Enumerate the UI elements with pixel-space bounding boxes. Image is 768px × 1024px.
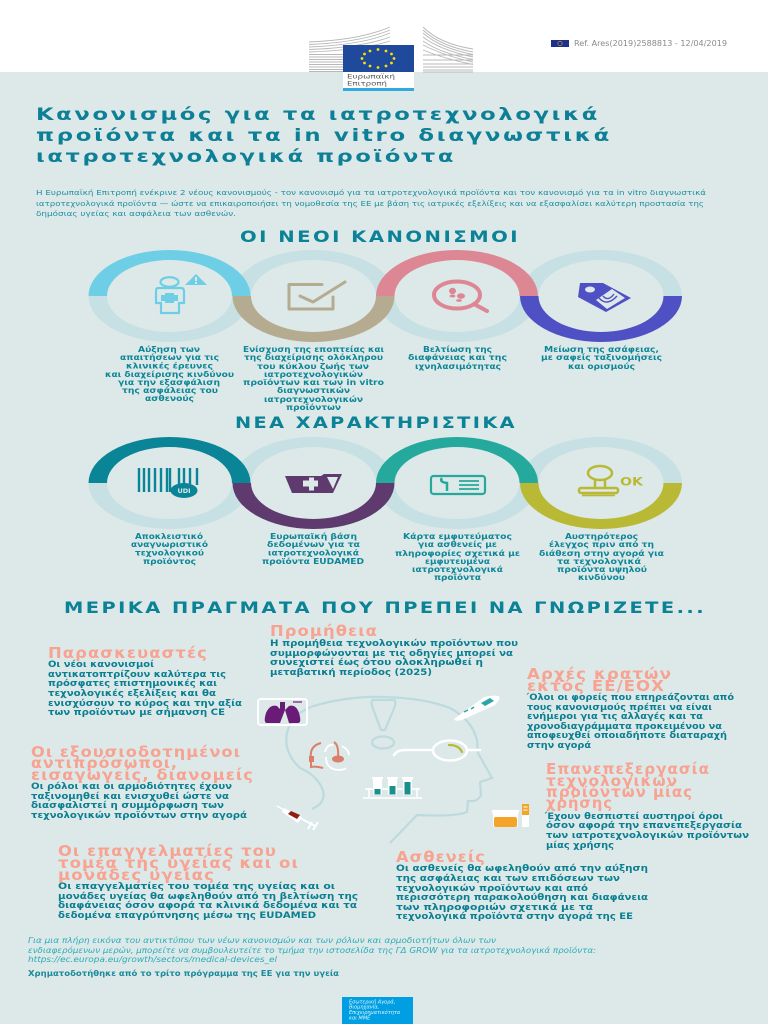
- block: non-EU/EEA authorities: [525, 665, 734, 751]
- title: ιατροτεχνολογικά προϊόντα: [36, 147, 456, 167]
- caption 2: προϊόντων: [286, 402, 341, 412]
- block: manufacturers: [48, 644, 242, 718]
- icon: barcode UDI: UDI: [177, 487, 191, 495]
- heading: Προμήθεια: [270, 622, 378, 640]
- caption 2: προϊόντων και των in vitro: [243, 377, 384, 387]
- caption 4: με σαφείς ταξινομήσεις: [541, 352, 662, 362]
- icon: sample cup: [492, 804, 529, 827]
- footer note: [28, 936, 596, 964]
- icon: barcode UDI: [139, 468, 198, 498]
- caption 5: [131, 531, 208, 566]
- body: συμμορφώνονται με τις οδηγίες μπορεί να: [270, 648, 513, 659]
- caption 1: απαιτήσεων για τις: [120, 352, 219, 362]
- DG GROW box: και ΜΜΕ: [349, 1016, 371, 1022]
- caption 7: προϊόντα: [434, 572, 481, 582]
- heading: αντιπρόσωποι,: [31, 754, 178, 772]
- caption 1: και διαχείρισης κινδύνου: [105, 369, 235, 379]
- body: της ασφάλειας και των επιδόσεων των: [396, 873, 620, 884]
- body: των ιατροτεχνολογικών προϊόντων: [546, 830, 749, 841]
- intro text: δημόσιας υγείας και ασφάλεια των ασθενών.: [36, 209, 236, 218]
- caption 6: ιατροτεχνολογικά: [268, 548, 359, 558]
- caption 4: και ορισμούς: [568, 361, 635, 371]
- body: διασφαλιστεί η συμμόρφωση των: [31, 800, 224, 811]
- heading: τεχνολογικών: [546, 772, 678, 790]
- document reference: Ref. Ares(2019)2588813 - 12/04/2019: [574, 39, 727, 48]
- intro text: ιατροτεχνολογικά προϊόντα — ώστε να επικαιροποιήσει τη νομοθεσία της ΕΕ με βάση τις ιατρικές εξελίξεις και να εξασφαλίσει καλύτερη προστασία της: [36, 199, 704, 208]
- body: [48, 659, 242, 718]
- caption 6: Ευρωπαϊκή βάση: [270, 531, 357, 541]
- body: στην αγορά: [527, 741, 591, 751]
- heading: μονάδες υγείας: [58, 866, 215, 884]
- caption 2: του κύκλου ζωής των: [257, 361, 369, 371]
- caption 7: εμφυτευμένα: [425, 556, 490, 566]
- caption 7: για ασθενείς με: [418, 539, 497, 549]
- caption 7: ιατροτεχνολογικά: [412, 564, 503, 574]
- caption 5: αναγνωριστικό: [131, 539, 208, 549]
- footer note: https://ec.europa.eu/growth/sectors/medical-devices_el: [28, 955, 278, 964]
- body: Οι ασθενείς θα ωφεληθούν από την αύξηση: [396, 863, 648, 874]
- caption 8: Αυστηρότερος: [565, 531, 638, 541]
- body: ενήμεροι για τις αλλαγές και τα: [527, 711, 703, 722]
- body: τεχνολογικά προϊόντα στην αγορά της ΕΕ: [396, 911, 633, 922]
- DG GROW box: Επιχειρηματικότητα: [349, 1009, 401, 1016]
- footer note: ενδιαφερόμενων μερών, μπορείτε να συμβουλευτείτε το τμήμα την ιστοσελίδα της ΓΔ GROW για τα ιατροτεχνολογικά προϊόντα:: [28, 946, 596, 955]
- icon: tag: [578, 283, 631, 312]
- caption 2: της διαχείρισης ολόκληρου: [244, 352, 384, 362]
- block: patients: [396, 848, 648, 922]
- caption 3: [408, 344, 507, 371]
- caption 8: [539, 531, 664, 582]
- ring chain: features: [88, 437, 682, 529]
- header: European Commission logo: [309, 27, 473, 91]
- icon: implant card: [431, 476, 485, 494]
- body: ταξινομηθεί και ενισχυθεί ώστε να: [31, 791, 229, 802]
- caption 5: τεχνολογικού: [135, 548, 205, 558]
- caption 4: Μείωση της ασάφειας,: [544, 344, 659, 354]
- body: Οι ρόλοι και οι αρμοδιότητες έχουν: [31, 781, 232, 792]
- intro text: [36, 188, 706, 218]
- heading: τομέα της υγείας και οι: [58, 854, 299, 872]
- block: procurement: [270, 622, 518, 678]
- caption 8: έλεγχος πριν από τη: [549, 539, 654, 549]
- caption 8: κινδύνου: [578, 572, 626, 582]
- heading: new features: ΝΕΑ ΧΑΡΑΚΤΗΡΙΣΤΙΚΑ: [235, 413, 517, 432]
- caption 1: [105, 344, 235, 403]
- body: περισσότερη παρακολούθηση και διαφάνεια: [396, 892, 648, 903]
- body: αντικατοπτρίζουν καλύτερα τις: [48, 669, 226, 680]
- body: ΄Εχουν θεσπιστεί αυστηροί όροι: [543, 811, 723, 822]
- heading: new regulations: ΟΙ ΝΕΟΙ ΚΑΝΟΝΙΣΜΟΙ: [240, 227, 520, 246]
- caption 7: πληροφορίες σχετικά με: [395, 548, 520, 558]
- body: Οι επαγγελματίες του τομέα της υγείας και οι: [58, 881, 335, 892]
- caption 2: ιατροτεχνολογικών: [264, 369, 363, 379]
- body: ενισχύσουν το κύρος και την αξία: [48, 698, 242, 709]
- heading: Οι εξουσιοδοτημένοι: [31, 743, 241, 761]
- captions: regulations: [105, 344, 662, 412]
- DG GROW box: [342, 997, 413, 1024]
- body: τεχνολογικών προϊόντων στην αγορά: [31, 810, 247, 821]
- caption 7: [395, 531, 520, 582]
- caption 5: Αποκλειστικό: [135, 531, 203, 541]
- DG GROW box: Εσωτερική Αγορά,: [349, 998, 395, 1006]
- icon: glasses: [394, 740, 480, 760]
- heading: [546, 760, 710, 812]
- title: [36, 105, 612, 167]
- body: διαφάνειας όσον αφορά τα κλινικά δεδομένα και τα: [58, 900, 357, 911]
- icon: thermometer: [454, 696, 500, 721]
- block: reprocessing single-use devices: [543, 760, 749, 851]
- caption 6: [262, 531, 364, 566]
- heading: εκτός ΕΕ/ΕΟΧ: [527, 677, 665, 695]
- body: [31, 781, 247, 821]
- heading: Οι επαγγελματίες του: [58, 842, 277, 860]
- caption 8: τα τεχνολογικά: [557, 556, 641, 566]
- logo box: [343, 45, 414, 91]
- caption 3: Βελτίωση της: [423, 344, 492, 354]
- icon: hearing aid: [309, 742, 349, 770]
- body: συνεχιστεί έως ότου ολοκληρωθεί η: [270, 657, 483, 668]
- heading: Ασθενείς: [396, 848, 486, 866]
- icon: OK stamp: OK: [620, 474, 644, 488]
- caption 1: της ασφάλειας του: [122, 385, 219, 395]
- heading: things to know: ΜΕΡΙΚΑ ΠΡΑΓΜΑΤΑ ΠΟΥ ΠΡΕΠΕΙ ΝΑ ΓΝΩΡΙΖΕΤΕ...: [64, 598, 706, 617]
- body: Η προμήθεια τεχνολογικών προϊόντων που: [270, 638, 518, 649]
- body: τεχνολογικές εξελίξεις και θα: [48, 688, 216, 699]
- title: Κανονισμός για τα ιατροτεχνολογικά: [36, 105, 600, 125]
- body: πρόσφατες επιστημονικές και: [48, 678, 217, 689]
- body: [270, 638, 518, 678]
- caption 6: δεδομένων για τα: [267, 539, 360, 549]
- body: χρονοδιαγράμματα προκειμένου να: [527, 721, 722, 732]
- body: [525, 692, 734, 751]
- heading: χρήσης: [546, 794, 613, 812]
- body: αποφευχθεί οποιαδήποτε διαταραχή: [527, 730, 727, 741]
- heading: προϊόντων μίας: [546, 783, 693, 801]
- caption 2: διαγνωστικών: [277, 385, 350, 395]
- icon: folder with cross: [285, 474, 342, 493]
- ring chain: regulations: [88, 250, 682, 342]
- caption 3: διαφάνειας και της: [408, 352, 507, 362]
- logo box: Επιτροπή: [347, 80, 387, 88]
- exclamation mark: [372, 700, 395, 748]
- heading: [527, 665, 672, 695]
- icon: patient with warning: [156, 274, 207, 313]
- body: [396, 863, 648, 922]
- body: Οι νέοι κανονισμοί: [48, 659, 155, 670]
- funding note: Χρηματοδοτήθηκε από το τρίτο πρόγραμμα της ΕΕ για την υγεία: [28, 968, 340, 978]
- icon: checkbox: [289, 282, 345, 309]
- block: authorised representatives: [31, 743, 254, 821]
- body: των προϊόντων με σήμανση CE: [48, 707, 225, 718]
- body: [58, 881, 358, 921]
- footer note: Για μια πλήρη εικόνα του αντικτύπου των νέων κανονισμών και των ρόλων και αρμοδιοτήτων όλων των: [28, 936, 497, 945]
- body: μεταβατική περίοδος (2025): [270, 667, 432, 678]
- heading: Παρασκευαστές: [48, 644, 208, 662]
- title: προϊόντα και τα in vitro διαγνωστικά: [36, 126, 612, 146]
- caption 1: Αύξηση των: [138, 344, 200, 354]
- body: ΄Ολοι οι φορείς που επηρεάζονται από: [525, 692, 734, 703]
- body: όσον αφορά την επανεπεξεργασία: [546, 820, 742, 831]
- body: μονάδες υγείας θα ωφεληθούν από τη βελτίωση της: [58, 891, 358, 902]
- head outline: [286, 697, 492, 843]
- building right: [423, 27, 473, 72]
- caption 3: ιχνηλασιμότητας: [415, 361, 501, 371]
- logo box: Ευρωπαϊκή: [347, 72, 395, 80]
- block: healthcare professionals: [58, 842, 358, 921]
- captions: features: [131, 531, 664, 582]
- icon: lungs: [258, 699, 307, 725]
- icon: syringe: [277, 806, 318, 830]
- caption 4: [541, 344, 662, 371]
- icon: test tubes: [363, 778, 422, 798]
- caption 8: διάθεση στην αγορά για: [539, 548, 664, 558]
- heading: Επανεπεξεργασία: [546, 760, 710, 778]
- caption 2: [243, 344, 384, 412]
- body: [543, 811, 749, 851]
- caption 7: Κάρτα εμφυτεύματος: [403, 531, 512, 541]
- heading: εισαγωγείς, διανομείς: [31, 766, 254, 784]
- body: τους κανονισμούς πρέπει να είναι: [527, 702, 712, 713]
- caption 1: για την εξασφάλιση: [118, 377, 220, 387]
- caption 6: προϊόντα EUDAMED: [262, 556, 364, 566]
- body: των πληροφοριών σχετικά με τα: [396, 902, 593, 913]
- icon: magnifier with footprints: [434, 282, 487, 311]
- body: μίας χρήσης: [546, 840, 614, 851]
- caption 2: Ενίσχυση της εποπτείας και: [243, 344, 384, 354]
- icon: OK stamp: [579, 466, 644, 496]
- head illustration: [258, 696, 529, 843]
- heading: Αρχές κρατών: [527, 665, 672, 683]
- heading: [58, 842, 299, 884]
- caption 1: κλινικές έρευνες: [126, 360, 213, 370]
- intro text: Η Ευρωπαϊκή Επιτροπή ενέκρινε 2 νέους κανονισμούς - τον κανονισμό για τα ιατροτεχνολογικά προϊόντα και τον κανονισμό για τα in vitro διαγνωστικά: [36, 188, 706, 197]
- body: τεχνολογικών προϊόντων και από: [396, 883, 588, 894]
- caption 2: ιατροτεχνολογικών: [264, 394, 363, 404]
- caption 8: προϊόντα υψηλού: [557, 564, 648, 574]
- caption 1: ασθενούς: [145, 393, 194, 403]
- heading: [31, 743, 254, 784]
- DG GROW box: Βιομηχανία,: [349, 1004, 379, 1010]
- building left: [309, 27, 390, 72]
- body: δεδομένα επαγρύπνησης μέσω της EUDAMED: [58, 910, 316, 921]
- caption 5: προϊόντος: [143, 556, 196, 566]
